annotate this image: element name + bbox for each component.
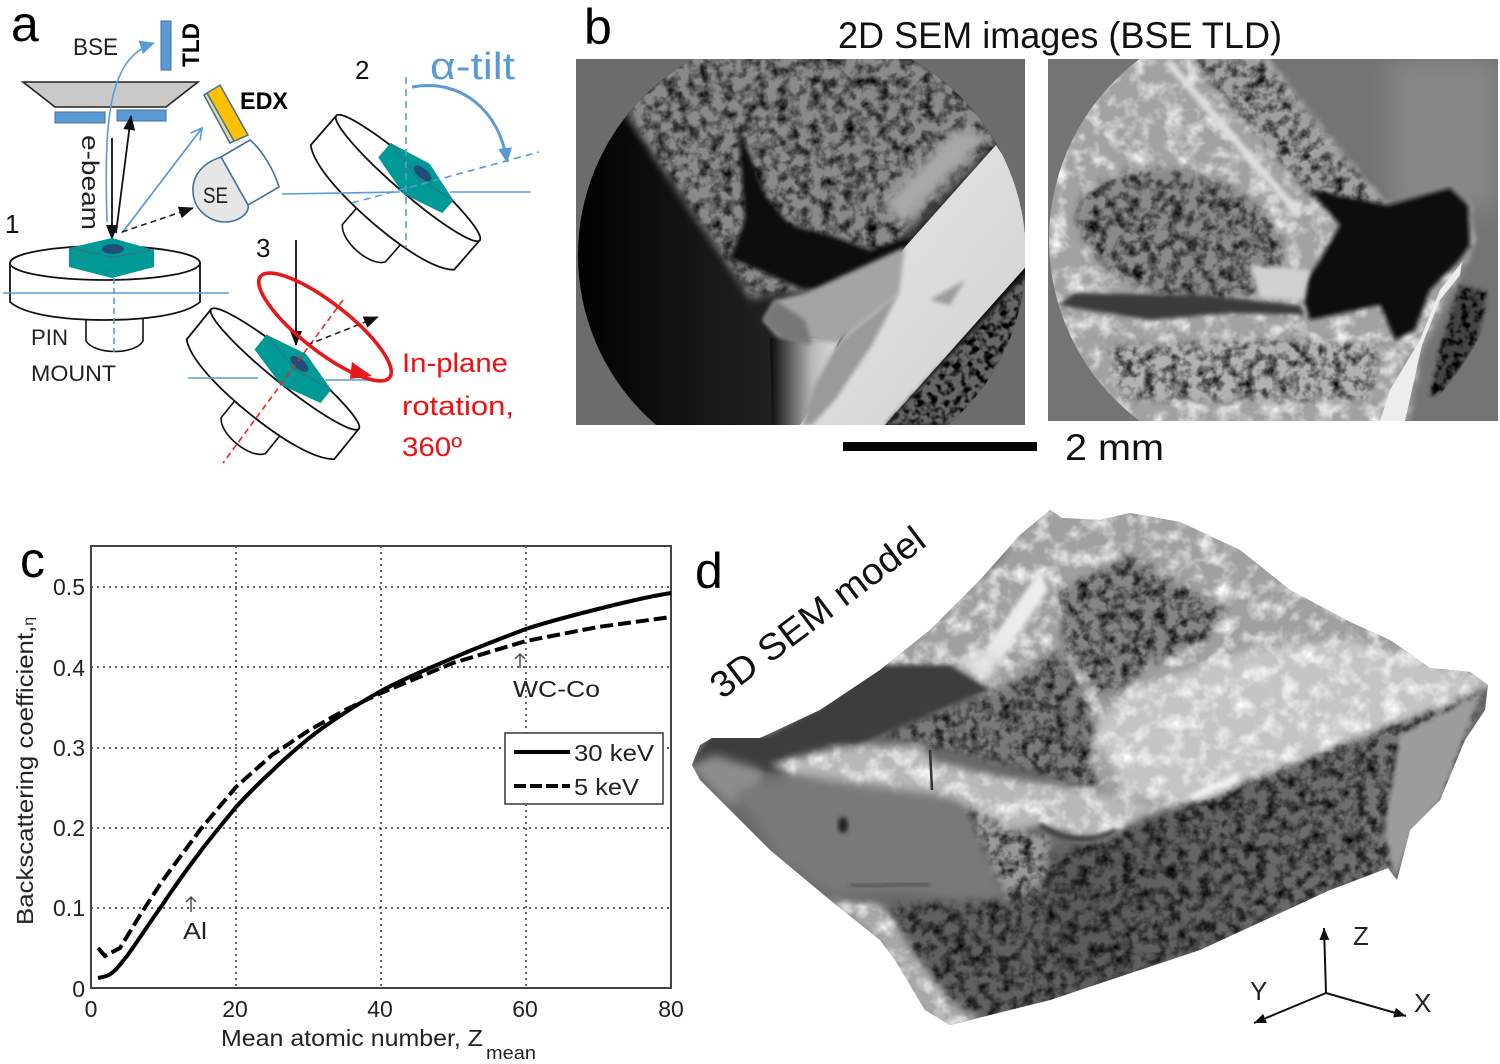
label 1: 1 [5, 209, 19, 239]
arrow: e-beam down [111, 138, 113, 239]
label 2: 2 [355, 55, 369, 85]
panel label b: b [584, 0, 612, 55]
red axis [223, 300, 343, 463]
annotation: WC-Co [513, 654, 600, 702]
scale bar [843, 442, 1037, 451]
icon: EDX detector [204, 85, 248, 143]
label EDX: EDX [240, 88, 288, 115]
x tick labels: 0 [85, 996, 97, 1022]
grid lines [91, 546, 671, 988]
heading rotated: 3D SEM model [702, 518, 933, 706]
panel: d, 3D SEM model [680, 495, 1500, 1040]
SEM image 1 [576, 50, 1030, 425]
blue axes of mount 2 [282, 77, 539, 248]
y tick labels: 0.3 [53, 735, 85, 761]
blue line of mount 3 [188, 378, 385, 380]
legend: 30 keV [574, 740, 655, 766]
axes triad: Z [1353, 921, 1369, 951]
plot frame [91, 546, 671, 988]
x tick labels: 20 [222, 996, 248, 1022]
blue axis of mount 1 [3, 278, 229, 352]
arrow: signal up [116, 116, 131, 233]
icon: mount position 2 [278, 97, 496, 307]
label: in-plane rotation: 360º [402, 432, 462, 462]
arrow: tilt curve [412, 85, 507, 162]
icon: mount position 3 [155, 290, 375, 498]
x tick labels [85, 996, 684, 1022]
y tick labels: 0.2 [53, 815, 85, 841]
icon: pole piece [23, 82, 198, 107]
label e-beam: e-beam [76, 135, 103, 230]
label TLD: TLD [178, 23, 205, 67]
arrow: blue to EDX [122, 128, 202, 233]
icon: mount position 1 [10, 238, 200, 352]
axes triad: Y [1250, 976, 1267, 1006]
label BSE: BSE [73, 34, 118, 61]
x axis title: mean [486, 1043, 536, 1063]
x tick labels: 80 [658, 996, 684, 1022]
label SE: SE [203, 183, 228, 208]
label: in-plane rotation [402, 348, 514, 462]
x tick labels: 60 [512, 996, 538, 1022]
y tick labels: 0 [72, 976, 85, 1002]
legend: 5 keV [574, 774, 640, 800]
arrow: e-beam 3 [295, 240, 297, 345]
3D model render [680, 495, 1500, 1040]
icon: red rotation ring [246, 258, 404, 396]
y axis title: Backscattering coefficient,η [12, 617, 38, 925]
icon: TLD detector [161, 21, 171, 70]
label PIN: PIN [31, 325, 68, 350]
panel: c, backscattering chart [12, 532, 684, 1063]
label: in-plane rotation: rotation, [402, 391, 514, 421]
y tick labels: 0.5 [53, 574, 85, 600]
panel label d: d [695, 543, 723, 599]
y tick labels: 0.4 [53, 655, 85, 681]
axes triad: X [1414, 988, 1431, 1018]
SEM image 2 [1040, 50, 1498, 430]
x tick labels: 40 [367, 996, 393, 1022]
annotation: Al: Al [183, 918, 207, 944]
icon: SE detector [193, 140, 279, 222]
annotation: WC-Co: WC-Co [513, 676, 600, 702]
scale label: 2 mm [1065, 427, 1164, 468]
axes triad [1250, 921, 1431, 1023]
label: in-plane rotation: In-plane [402, 348, 508, 378]
label alpha-tilt: α-tilt [430, 46, 516, 88]
heading: 2D SEM images (BSE TLD) [838, 15, 1282, 56]
arrow: dashed to SE [122, 208, 193, 232]
arrow: dashed 3 [307, 317, 378, 345]
arrow: backscattered electrons [106, 43, 154, 222]
panel: b, 2D SEM images [576, 0, 1498, 468]
panel: a, SEM setup schematic [3, 0, 539, 498]
annotation: Al [183, 897, 207, 944]
curve: 5 keV [98, 617, 671, 956]
legend [505, 733, 663, 804]
curve: 30 keV [98, 593, 671, 978]
x axis title: Mean atomic number, Z [221, 1025, 483, 1051]
x axis title [221, 1025, 536, 1063]
y tick labels [53, 574, 85, 1002]
panel label c: c [20, 532, 45, 588]
icon: BSE detector segments [55, 110, 166, 123]
label MOUNT: MOUNT [31, 361, 116, 386]
y tick labels: 0.1 [53, 895, 85, 921]
label 3: 3 [256, 233, 270, 263]
